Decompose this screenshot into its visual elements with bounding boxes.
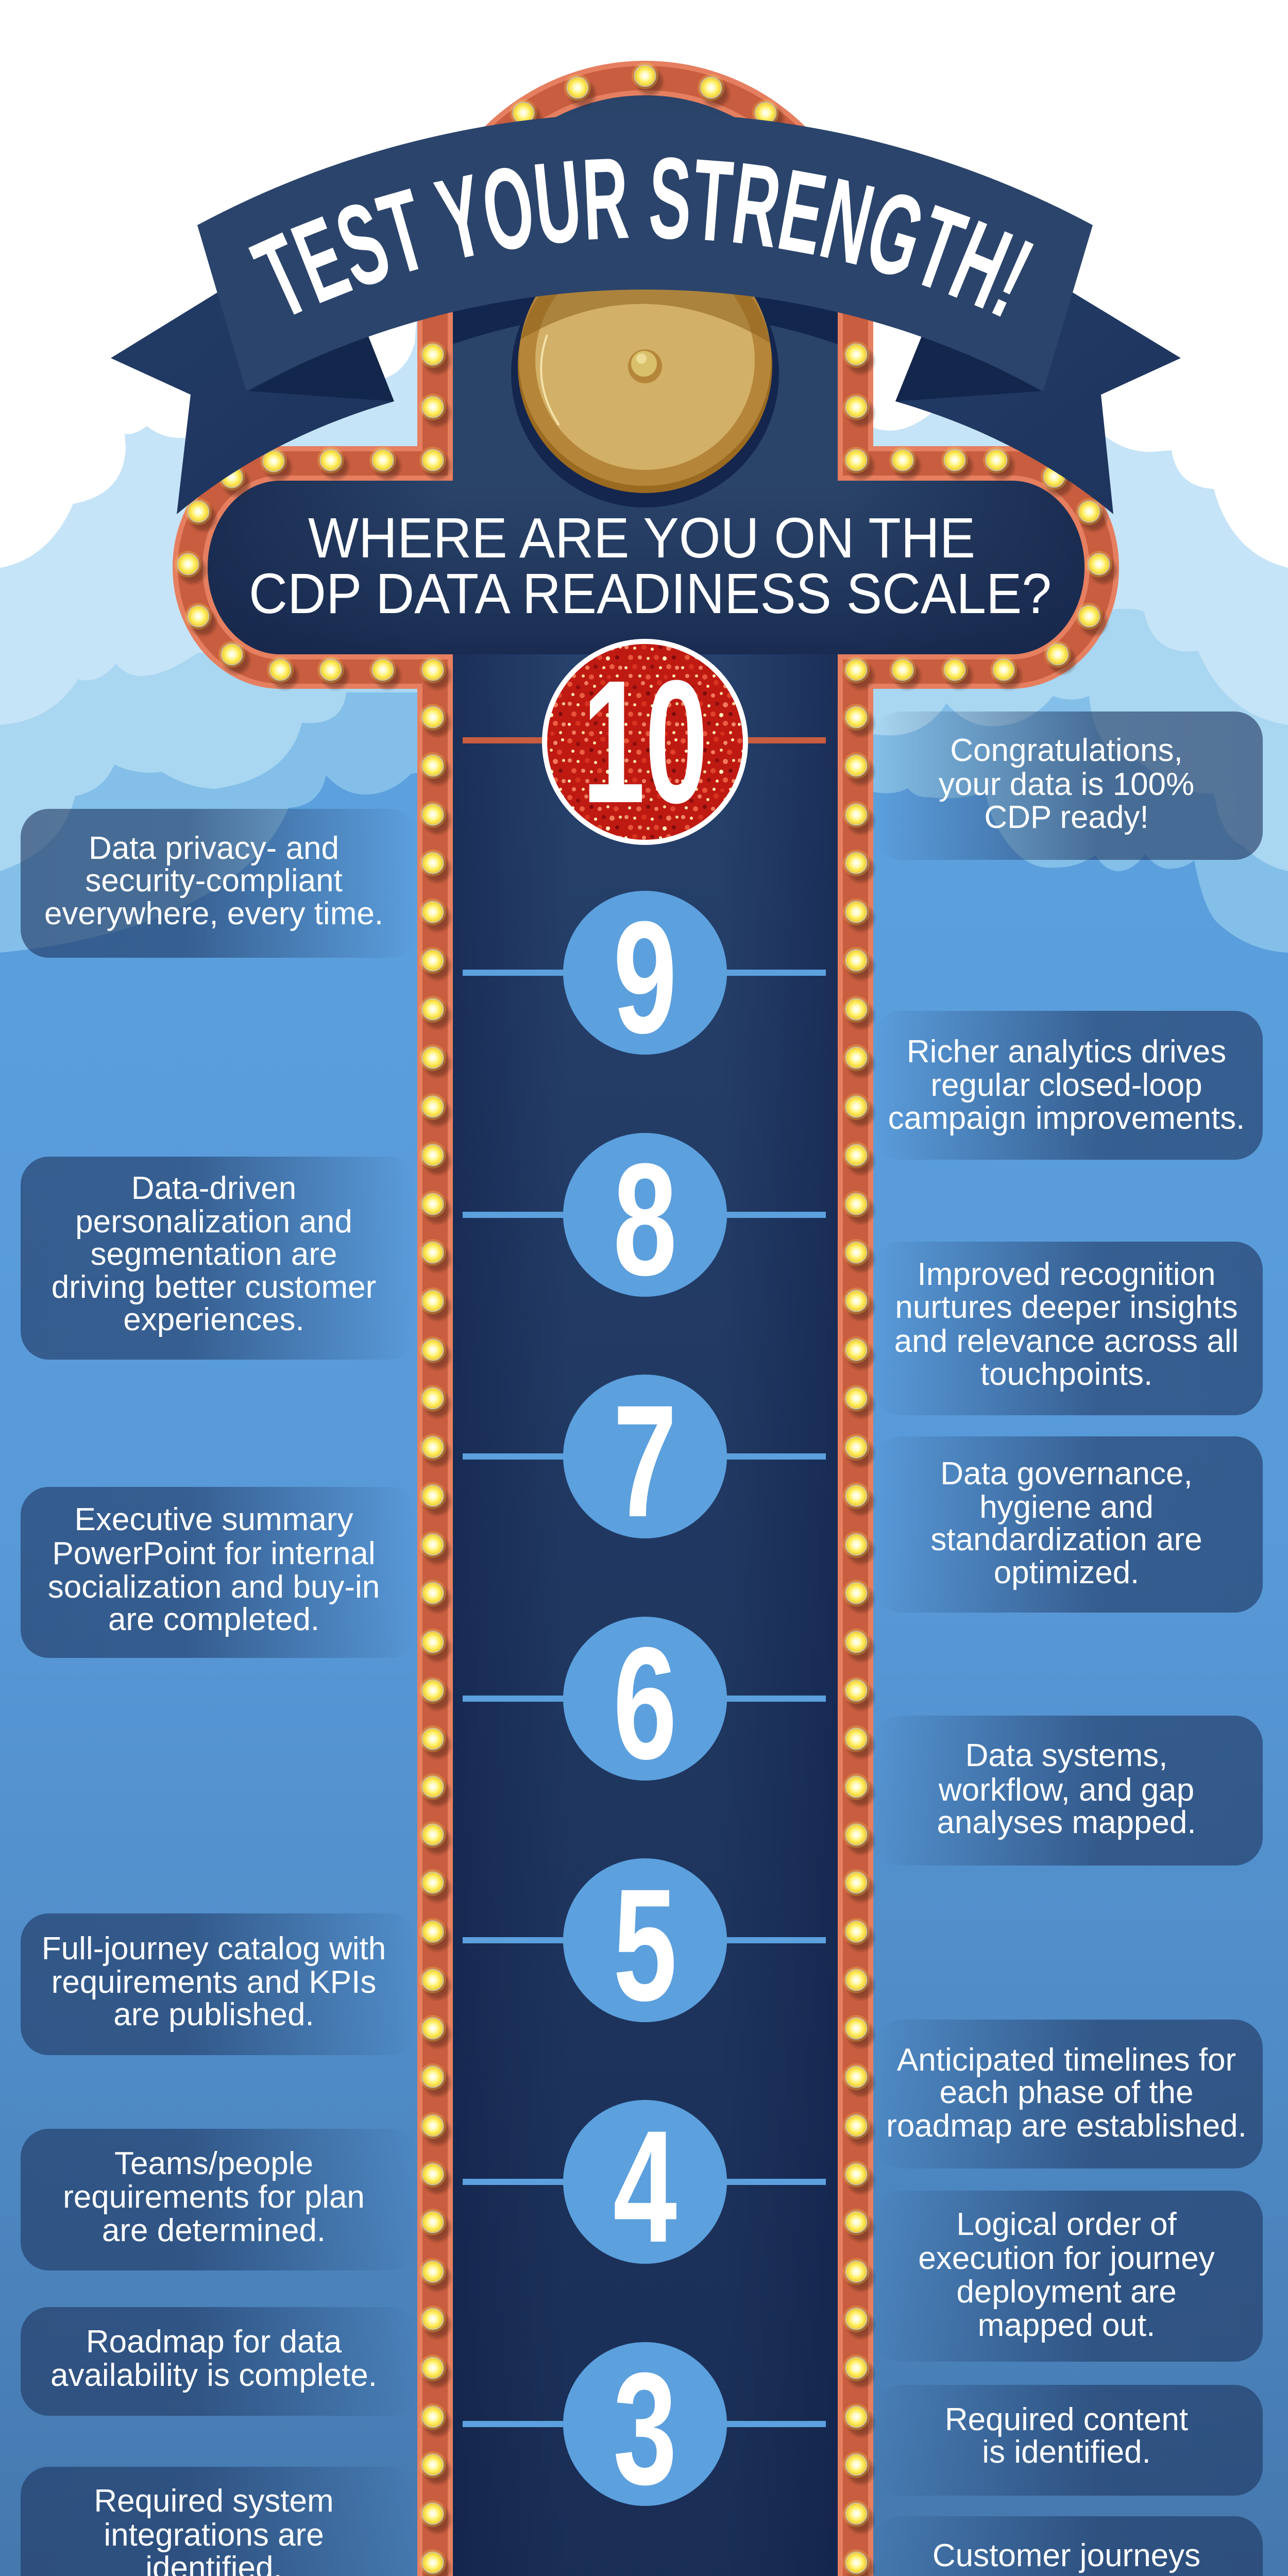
card: full-journey catalog: are published.	[113, 1997, 314, 2032]
title: TEST YOUR STRENGTH!	[248, 157, 1033, 317]
banner	[197, 117, 1093, 391]
card: data-driven personalization: driving better customer	[52, 1269, 376, 1305]
card: data privacy: Data privacy- and	[89, 831, 339, 866]
card: executive summary: are completed.	[108, 1602, 319, 1637]
level 8 marker	[463, 1130, 826, 1309]
level 7 marker	[463, 1371, 826, 1550]
card: improved recognition: nurtures deeper insights	[895, 1290, 1238, 1325]
level 3 marker	[463, 2339, 826, 2518]
subtitle: CDP DATA READINESS SCALE?	[249, 562, 1052, 625]
card: data governance: standardization are	[930, 1522, 1202, 1557]
level 3 marker: 3	[613, 2339, 677, 2518]
level 8 marker: 8	[613, 1130, 677, 1309]
marquee frame	[173, 61, 1119, 2576]
card: improved recognition	[873, 1242, 1263, 1415]
card: richer analytics	[873, 1011, 1263, 1160]
level 4 marker: 4	[613, 2097, 677, 2276]
card: data-driven personalization: segmentation are	[90, 1236, 337, 1272]
card: logical order: mapped out.	[978, 2308, 1155, 2343]
card: data systems: analyses mapped.	[937, 1805, 1196, 1840]
card: full-journey catalog: requirements and KPIs	[52, 1964, 376, 2000]
card: anticipated timelines: roadmap are established.	[886, 2108, 1247, 2144]
level 10 marker: 10	[582, 644, 708, 840]
shadow band under banner	[453, 297, 838, 344]
card: data governance: hygiene and	[979, 1489, 1154, 1525]
card: data-driven personalization	[21, 1157, 417, 1360]
card: required content: Required content	[945, 2402, 1188, 2437]
banner ribbon tails	[111, 292, 1181, 514]
card: data privacy	[21, 809, 417, 958]
card: required system integrations: integrations are	[104, 2517, 324, 2553]
card: data governance	[873, 1436, 1263, 1613]
card: logical order: deployment are	[956, 2274, 1177, 2310]
card: roadmap: Roadmap for data	[86, 2324, 342, 2360]
card: logical order: execution for journey	[918, 2241, 1215, 2276]
card: data systems: Data systems,	[965, 1738, 1167, 1773]
card: congratulations	[873, 711, 1263, 860]
bell	[511, 290, 779, 507]
card: data-driven personalization: experiences.	[123, 1302, 304, 1337]
card: anticipated timelines: each phase of the	[940, 2075, 1193, 2110]
level 6 marker	[463, 1614, 826, 1792]
card: required system integrations: Required system	[94, 2483, 334, 2519]
card: anticipated timelines: Anticipated timelines for	[897, 2042, 1236, 2078]
card: full-journey catalog	[21, 1913, 417, 2055]
subtitle	[249, 506, 1052, 625]
clouds	[0, 0, 1288, 953]
card: customer journeys: Customer journeys	[933, 2538, 1200, 2573]
marquee light bulbs	[175, 62, 1119, 2576]
card: logical order: Logical order of	[956, 2207, 1177, 2242]
card: full-journey catalog: Full-journey catalog with	[42, 1931, 386, 1967]
card: teams and people	[21, 2129, 417, 2270]
card: executive summary	[21, 1487, 417, 1658]
card: richer analytics: regular closed-loop	[930, 1067, 1202, 1103]
card: data privacy: security-compliant	[85, 863, 343, 899]
level 7 marker: 7	[613, 1371, 677, 1550]
level 6 marker: 6	[613, 1614, 677, 1792]
card: data privacy: everywhere, every time.	[44, 896, 383, 931]
card: congratulations: CDP ready!	[984, 800, 1149, 835]
card: improved recognition: Improved recognition	[918, 1257, 1215, 1292]
card: teams and people: requirements for plan	[63, 2179, 365, 2215]
card: data-driven personalization: personalization and	[75, 1204, 352, 1240]
tower interior	[208, 95, 1084, 2576]
card: roadmap: availability is complete.	[50, 2358, 377, 2393]
card: logical order	[873, 2191, 1263, 2362]
card: data governance: Data governance,	[940, 1456, 1193, 1492]
card: richer analytics: campaign improvements.	[888, 1100, 1245, 1136]
card: teams and people: Teams/people	[114, 2146, 313, 2181]
card: congratulations: Congratulations,	[950, 733, 1183, 768]
card: anticipated timelines	[873, 2020, 1263, 2168]
card: executive summary: Executive summary	[75, 1502, 353, 1537]
card: richer analytics: Richer analytics drives	[907, 1034, 1226, 1070]
card: improved recognition: touchpoints.	[980, 1357, 1153, 1392]
subtitle: WHERE ARE YOU ON THE	[308, 506, 975, 570]
level 10 marker	[463, 639, 826, 845]
level 5 marker	[463, 1855, 826, 2034]
card: required content: is identified.	[982, 2434, 1151, 2470]
card: required system integrations	[21, 2467, 417, 2576]
icon: bell rivet	[628, 349, 662, 383]
level 9 marker: 9	[613, 888, 677, 1066]
level 9 marker	[463, 888, 826, 1066]
level 4 marker	[463, 2097, 826, 2276]
card: roadmap	[21, 2307, 417, 2416]
card: executive summary: socialization and buy-in	[48, 1569, 380, 1605]
card: congratulations: your data is 100%	[939, 767, 1194, 802]
card: required content	[873, 2385, 1263, 2496]
card: data-driven personalization: Data-driven	[131, 1171, 296, 1206]
card: data systems: workflow, and gap	[938, 1772, 1194, 1808]
level 5 marker: 5	[613, 1855, 677, 2034]
card: executive summary: PowerPoint for internal	[52, 1536, 376, 1571]
card: customer journeys	[873, 2516, 1263, 2576]
card: data governance: optimized.	[994, 1555, 1139, 1590]
card: teams and people: are determined.	[102, 2213, 326, 2248]
card: improved recognition: and relevance across all	[894, 1324, 1239, 1359]
card: data systems	[873, 1716, 1263, 1866]
